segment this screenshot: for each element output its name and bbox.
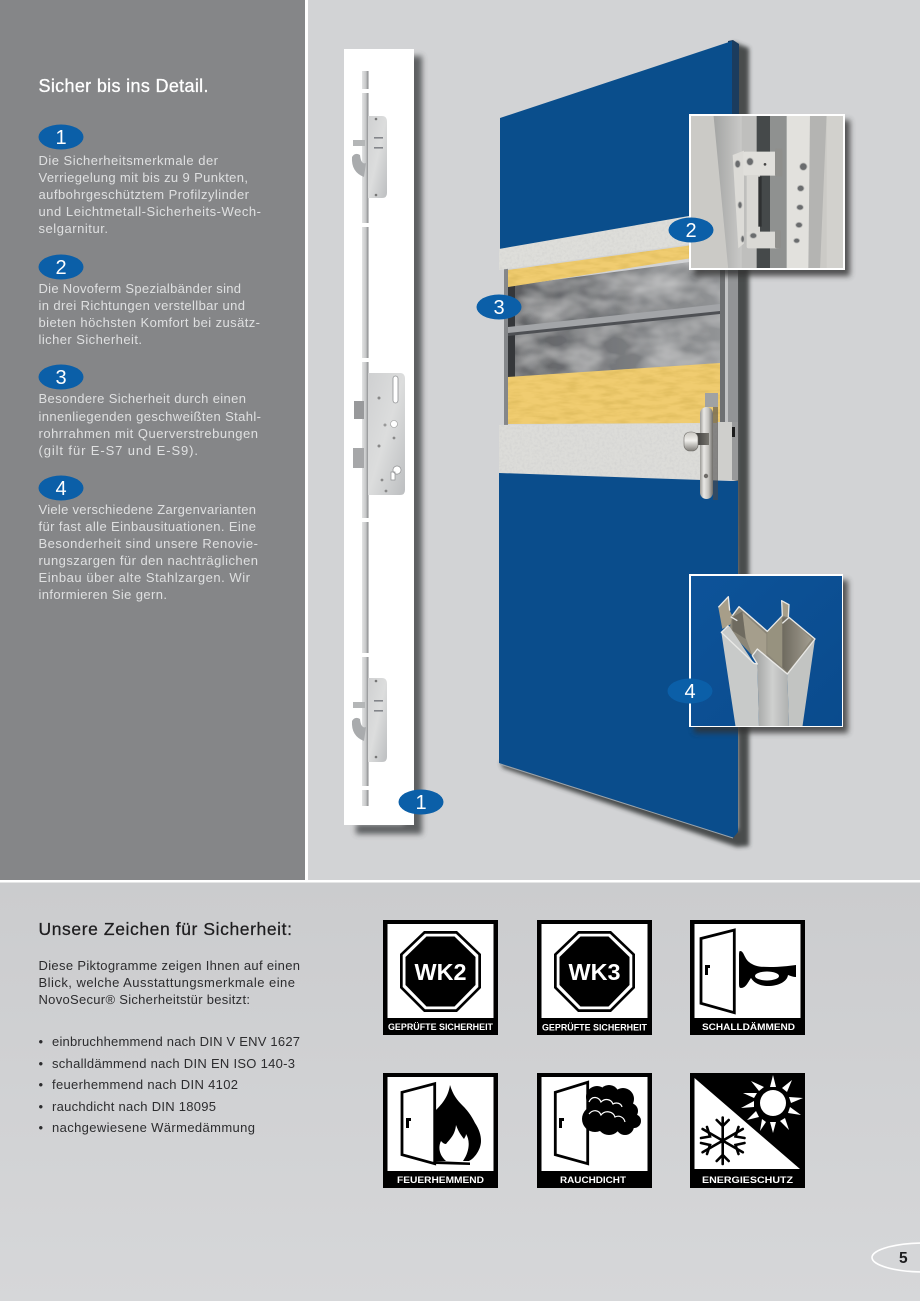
pictogram: Schalldämmend (690, 920, 805, 1035)
inset: hinge detail (689, 113, 850, 276)
pictogram: Energieschutz (690, 1073, 805, 1188)
bullet list: features: • (38, 1120, 44, 1135)
text block: pictogram intro: Blick, welche Ausstattungsmerkmale eine (38, 975, 295, 990)
steel frame left (504, 266, 508, 426)
text block 4 (38, 502, 258, 602)
lower blue skin (499, 473, 738, 838)
bullet list: features: einbruchhemmend nach DIN V ENV 1627 (52, 1034, 300, 1049)
dark inner edge of sheet (508, 286, 515, 378)
text block 4: rungszargen für den nachträglichen (38, 553, 258, 568)
panel: multi-point lock strip (344, 49, 422, 834)
pictogram: WK3 (537, 920, 652, 1035)
steel frame right (720, 255, 738, 425)
steel sheet (508, 258, 720, 380)
text block 3: innenliegenden geschweißten Stahl- (38, 409, 261, 424)
pictogram: Feuerhemmend (383, 1073, 498, 1188)
number badge 2 (38, 254, 84, 280)
badge: callout 4 (668, 678, 712, 704)
text block 4: für fast alle Einbausituationen. Eine (38, 519, 256, 534)
bullet list: features (38, 1034, 300, 1135)
panel: left grey text column (0, 0, 308, 880)
number badge 2: 2 (55, 257, 67, 279)
pictogram: WK2 (383, 920, 498, 1035)
bullet list: features: nachgewiesene Wärmedämmung (52, 1120, 255, 1135)
bullet list: features: • (38, 1034, 44, 1049)
badge: callout 3 (476, 294, 522, 320)
text block 3: Besondere Sicherheit durch einen (38, 391, 246, 406)
inset: frame profile detail (689, 574, 848, 733)
lower insulation (508, 363, 720, 424)
text block 3 (38, 391, 261, 458)
text block: pictogram intro: NovoSecur® Sicherheitstür besitzt: (38, 992, 250, 1007)
pictogram: Schalldämmend: SCHALLDÄMMEND (702, 1021, 795, 1032)
badge: callout 1 (398, 790, 444, 814)
heading: Sicher bis ins Detail: Sicher bis ins Detail. (38, 76, 208, 96)
text block 2: in drei Richtungen verstellbar und (38, 298, 245, 313)
text block 1: aufbohrgeschütztem Profilzylinder (38, 187, 250, 202)
text block 3: (gilt für E-S7 und E-S9). (38, 443, 198, 458)
page number tab (872, 1243, 920, 1272)
number badge 4: 4 (55, 478, 67, 500)
bullet list: features: • (38, 1077, 44, 1092)
text block 2: Die Novoferm Spezialbänder sind (38, 281, 241, 296)
page number tab: 5 (899, 1250, 908, 1267)
door drop shadow (500, 42, 749, 847)
bullet list: features: • (38, 1099, 44, 1114)
horizontal white divider (0, 880, 920, 882)
pictogram: Feuerhemmend: FEUERHEMMEND (397, 1174, 484, 1185)
text block 1: selgarnitur. (38, 221, 108, 236)
text block 4: Viele verschiedene Zargenvarianten (38, 502, 256, 517)
text block 1: und Leichtmetall-Sicherheits-Wech- (38, 204, 261, 219)
upper concrete layer (499, 208, 735, 270)
text block 1 (38, 153, 261, 236)
text block: pictogram intro: Diese Piktogramme zeigen Ihnen auf einen (38, 958, 300, 973)
number badge 3 (38, 364, 84, 390)
pictogram: WK2: WK2 (414, 959, 466, 985)
text block 2 (38, 281, 260, 347)
pictogram: Energieschutz: ENERGIESCHUTZ (702, 1174, 793, 1185)
text block 2: licher Sicherheit. (38, 332, 142, 347)
text block 4: Besonderheit sind unsere Renovie- (38, 536, 258, 551)
door right edge (728, 40, 739, 260)
panel: door cutaway illustration (499, 40, 749, 847)
badge: callout 3: 3 (493, 297, 505, 319)
light line along the bottom edge (500, 764, 733, 838)
number badge 3: 3 (55, 367, 67, 389)
number badge 4 (38, 476, 84, 500)
number badge 1 (38, 124, 84, 150)
bullet list: features: schalldämmend nach DIN EN ISO 140-3 (52, 1056, 295, 1071)
pictogram: WK3: GEPRÜFTE SICHERHEIT (542, 1022, 647, 1032)
lock case: central lock with cylinder (353, 373, 405, 495)
lock case: bottom hook (352, 678, 387, 762)
bottom band background (0, 882, 920, 1301)
bullet list: features: • (38, 1056, 44, 1071)
door handle (684, 393, 738, 500)
badge: callout 1: 1 (415, 792, 427, 814)
number badge 1: 1 (55, 127, 67, 149)
text block 4: Einbau über alte Stahlzargen. Wir (38, 570, 251, 585)
text block 1: Die Sicherheitsmerkmale der (38, 153, 219, 168)
lower concrete layer (499, 423, 717, 480)
text block 2: bieten höchsten Komfort bei zusätz- (38, 315, 260, 330)
cross brace (508, 304, 720, 336)
bullet list: features: rauchdicht nach DIN 18095 (52, 1099, 216, 1114)
lock case: top hook (352, 116, 387, 198)
pictogram: WK3: WK3 (568, 959, 620, 985)
text block 3: rohrrahmen mit Querverstrebungen (38, 426, 258, 441)
badge: callout 2: 2 (685, 220, 697, 242)
text block 4: informieren Sie gern. (38, 587, 167, 602)
pictogram: Rauchdicht: RAUCHDICHT (560, 1174, 626, 1185)
text block: pictogram intro (38, 958, 300, 1007)
pictogram: Rauchdicht (537, 1073, 652, 1188)
badge: callout 2 (668, 218, 714, 242)
badge: callout 4: 4 (684, 681, 696, 703)
upper blue skin (500, 41, 732, 249)
pictogram: WK2: GEPRÜFTE SICHERHEIT (388, 1021, 493, 1032)
upper insulation (508, 240, 730, 287)
text block 1: Verriegelung mit bis zu 9 Punkten, (38, 170, 248, 185)
bullet list: features: feuerhemmend nach DIN 4102 (52, 1077, 238, 1092)
heading: Unsere Zeichen für Sicherheit: Unsere Zeichen für Sicherheit: (38, 919, 292, 939)
